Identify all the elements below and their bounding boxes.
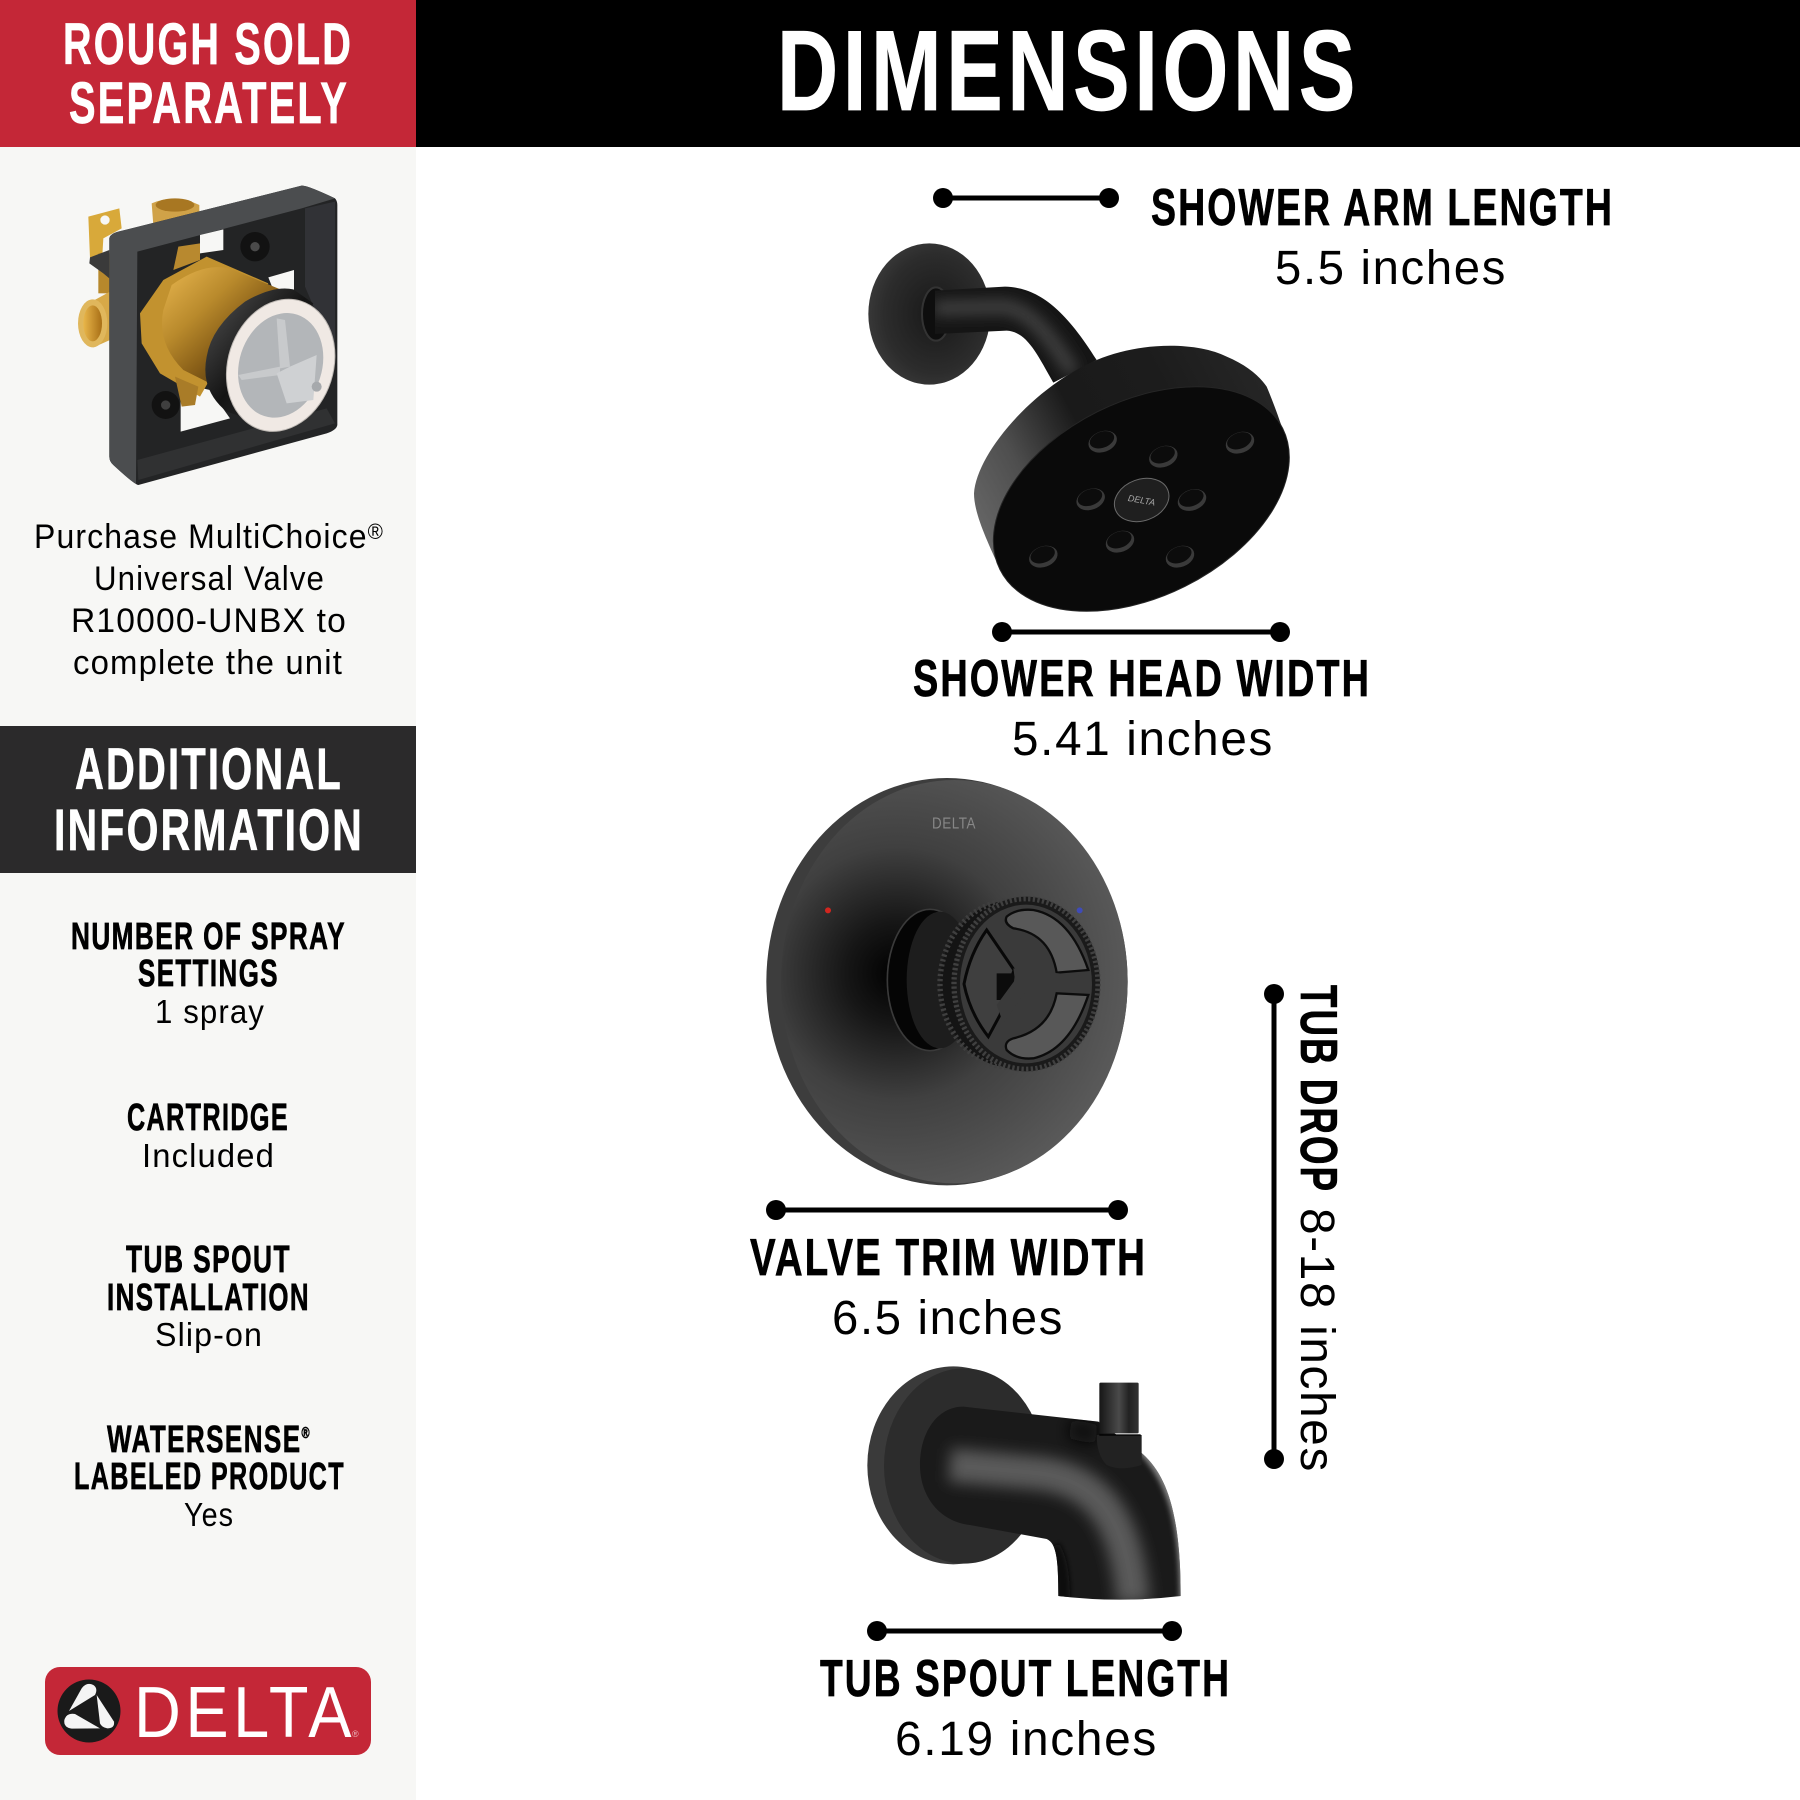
heading: additional information: INFORMATION: [54, 798, 364, 863]
dimension line: shower arm: [933, 188, 1119, 208]
red banner: rough sold separately: SEPARATELY: [69, 71, 349, 136]
title banner: dimensions: DIMENSIONS: [777, 8, 1360, 135]
spec: watersense labeled product: ®: [301, 1425, 311, 1442]
heading: additional information: ADDITIONAL: [75, 737, 343, 802]
label: shower head width: SHOWER HEAD WIDTH: [913, 650, 1371, 708]
image: valve trim: [766, 778, 1128, 1185]
label: tub drop: [1289, 985, 1347, 1473]
image: rough-in valve: [78, 186, 352, 485]
text: purchase note: complete the unit: [73, 644, 343, 682]
label: shower head width: 5.41 inches: [1012, 713, 1274, 766]
spec: number of spray settings: SETTINGS: [138, 953, 279, 995]
text: purchase note: ®: [368, 519, 384, 544]
spec: cartridge: [127, 1097, 289, 1174]
label: valve trim width: VALVE TRIM WIDTH: [750, 1229, 1147, 1287]
label: tub spout length: 6.19 inches: [895, 1713, 1158, 1766]
label: tub spout length: [820, 1650, 1231, 1766]
red banner: rough sold separately: [0, 0, 416, 147]
dimension line: valve trim width: [766, 1200, 1128, 1220]
spec: tub spout installation: Slip-on: [155, 1316, 263, 1353]
dimension line: tub spout length: [867, 1621, 1182, 1641]
spec: tub spout installation: [107, 1239, 310, 1353]
text: purchase note: Universal Valve: [94, 560, 325, 598]
spec: watersense labeled product: Yes: [184, 1496, 234, 1533]
label: tub spout length: TUB SPOUT LENGTH: [820, 1650, 1231, 1708]
red banner: rough sold separately: ROUGH SOLD: [63, 12, 353, 77]
label: shower head width: [913, 650, 1371, 766]
sidebar background: [0, 147, 416, 1800]
nozzles on the shower head: [1026, 427, 1257, 571]
spec: tub spout installation: TUB SPOUT: [126, 1239, 291, 1281]
image: tub spout: [867, 1366, 1183, 1603]
spec: watersense labeled product: WATERSENSE: [107, 1419, 391, 1461]
label: tub drop: 8-18 inches: [1290, 1208, 1343, 1473]
label: tub drop: TUB DROP: [1289, 985, 1347, 1193]
title banner: dimensions: [416, 0, 1800, 147]
label: shower arm length: 5.5 inches: [1275, 242, 1507, 295]
image: valve trim: DELTA: [932, 815, 976, 832]
spec: cartridge: Included: [142, 1137, 275, 1174]
dimension line: shower head width: [992, 622, 1290, 642]
text: purchase note: Purchase MultiChoice: [34, 518, 389, 556]
spec: tub spout installation: INSTALLATION: [107, 1277, 310, 1319]
spec: number of spray settings: NUMBER OF SPRAY: [71, 916, 346, 958]
image: shower head and arm: [868, 243, 1290, 612]
spec: watersense labeled product: [74, 1419, 345, 1533]
image: shower head and arm: DELTA: [1127, 493, 1156, 508]
label: valve trim width: 6.5 inches: [832, 1292, 1064, 1345]
spec: number of spray settings: [71, 916, 346, 1030]
label: shower arm length: [1151, 179, 1614, 295]
spec: number of spray settings: 1 spray: [155, 993, 265, 1030]
label: valve trim width: [750, 1229, 1147, 1345]
spec: watersense labeled product: LABELED PRODUCT: [74, 1456, 345, 1498]
logo: delta: DELTA: [134, 1673, 356, 1753]
spec: cartridge: CARTRIDGE: [127, 1097, 289, 1139]
logo: delta: ®: [352, 1729, 359, 1739]
label: shower arm length: SHOWER ARM LENGTH: [1151, 179, 1614, 237]
heading: additional information: [0, 726, 416, 873]
text: purchase note: [34, 518, 384, 682]
dimension line: tub drop: [1264, 984, 1284, 1469]
logo: delta: [45, 1667, 371, 1755]
text: purchase note: R10000-UNBX to: [71, 602, 347, 640]
